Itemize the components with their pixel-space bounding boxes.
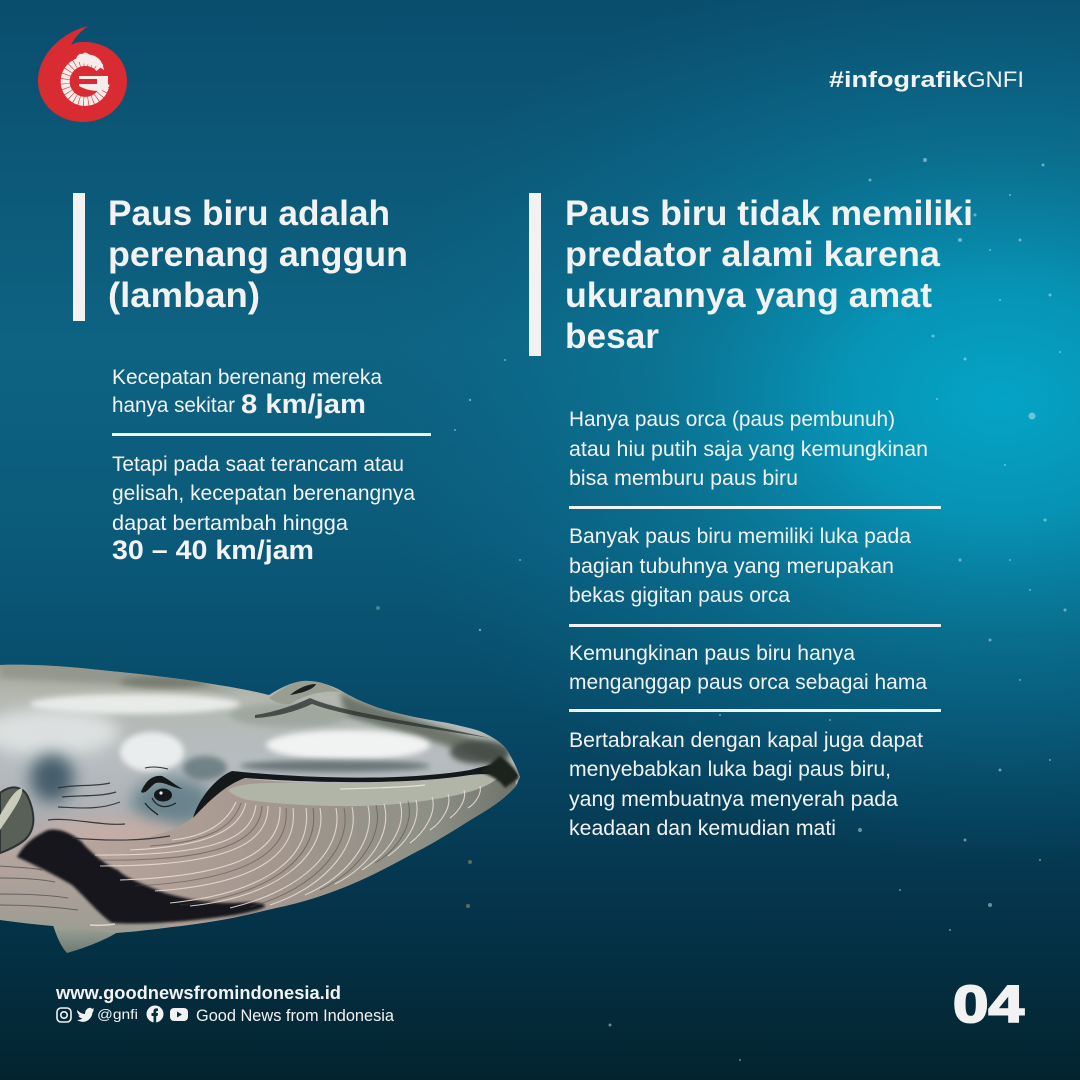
left heading: (lamban): [108, 276, 260, 315]
fact: orca and white shark: bisa memburu paus biru: [569, 467, 798, 490]
fact: orca and white shark: atau hiu putih saja yang kemungkinan: [569, 438, 928, 461]
illustration: blue whale head: [0, 660, 520, 953]
right heading: besar: [565, 317, 659, 356]
left heading: Paus biru adalah: [108, 194, 390, 233]
page name: Good News from Indonesia: [196, 1006, 395, 1025]
eye: [141, 767, 183, 815]
right heading: [565, 194, 973, 356]
footer: website and social media: [55, 983, 395, 1025]
threatened speed text: Tetapi pada saat terancam atau: [112, 453, 404, 476]
lower left pale belly with grooves: [0, 866, 78, 910]
fact: bite scars: bagian tubuhnya yang merupakan: [569, 555, 894, 578]
blowhole: [255, 681, 490, 738]
highlights: [30, 694, 240, 714]
upper back shading: [0, 664, 230, 692]
right heading: predator alami karena: [565, 235, 941, 274]
hashtag: [829, 67, 1024, 92]
pink cheek: [40, 817, 180, 853]
right heading bar: [529, 193, 541, 356]
fact: ship collisions: menyebabkan luka bagi paus biru,: [569, 758, 891, 781]
panel: swimming speed: [73, 193, 431, 565]
threatened speed text: gelisah, kecepatan berenangnya: [112, 482, 415, 505]
lower jaw / throat: [85, 775, 516, 927]
icon: youtube: [170, 1008, 188, 1021]
left heading: [108, 194, 408, 315]
lower lip band: [228, 774, 497, 806]
pectoral fin: [0, 787, 33, 853]
handle: @gnfi: [97, 1006, 138, 1022]
icon: twitter: [77, 1008, 94, 1022]
hashtag: #infografik: [829, 67, 968, 92]
fact: orca as pest: Kemungkinan paus biru hanya: [569, 642, 855, 665]
dark throat patch: [17, 830, 265, 924]
dark grey under the snout: [240, 760, 430, 772]
fact: orca and white shark: Hanya paus orca (paus pembunuh): [569, 408, 895, 431]
icon: facebook: [146, 1006, 164, 1023]
normal speed text: Kecepatan berenang mereka: [112, 366, 382, 389]
right heading: ukurannya yang amat: [565, 276, 932, 315]
fact: bite scars: [569, 525, 911, 607]
fact: bite scars: Banyak paus biru memiliki luka pada: [569, 525, 911, 548]
throat grooves: [90, 786, 480, 925]
website: www.goodnewsfromindonesia.id: [55, 983, 341, 1003]
normal speed text: [112, 366, 382, 419]
fact: ship collisions: yang membuatnya menyerah pada: [569, 788, 898, 811]
left heading: perenang anggun: [108, 235, 408, 274]
normal speed text: hanya sekitar: [112, 394, 235, 417]
page number: 04: [953, 976, 1024, 1034]
fact: orca and white shark: [569, 408, 928, 490]
logo: GNFI red emblem: [38, 26, 127, 122]
ventral fin: [53, 922, 118, 953]
icon: instagram: [57, 1008, 71, 1022]
right heading: Paus biru tidak memiliki: [565, 194, 973, 233]
mouth line: [193, 764, 518, 818]
panel: no natural predators: [529, 193, 973, 840]
neck wrinkles: [48, 783, 170, 840]
eye-side blue shading: [132, 778, 212, 826]
threatened speed text: dapat bertambah hingga: [112, 512, 348, 535]
threatened speed text: 30 – 40 km/jam: [112, 535, 314, 565]
fact: ship collisions: Bertabrakan dengan kapal juga dapat: [569, 729, 923, 752]
fact: ship collisions: [569, 729, 923, 840]
fact: ship collisions: keadaan dan kemudian mati: [569, 817, 836, 840]
fact: orca as pest: menganggap paus orca sebagai hama: [569, 671, 927, 694]
threatened speed text: [112, 453, 415, 565]
normal speed text: 8 km/jam: [241, 389, 366, 419]
whale body: [0, 665, 520, 933]
left heading bar: [73, 193, 85, 321]
fact: bite scars: bekas gigitan paus orca: [569, 584, 790, 607]
hashtag: GNFI: [967, 67, 1024, 92]
fact: orca as pest: [569, 642, 927, 694]
